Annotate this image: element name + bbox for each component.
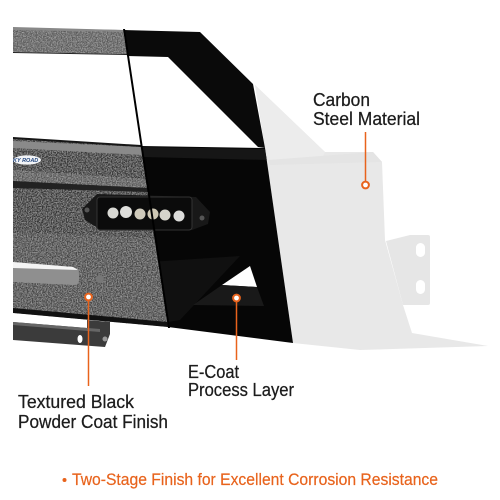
logo badge: KY ROAD (13, 158, 38, 164)
callout: e-coat process layer (188, 295, 294, 400)
icon: mounting bracket (386, 235, 430, 305)
callout: carbon steel material (313, 90, 420, 188)
callout: textured black powder coat: Powder Coat Finish (18, 412, 168, 432)
divider line between finish stages (123, 29, 170, 328)
panel: textured powder coat section (13, 27, 173, 347)
top bar (13, 28, 127, 54)
bolt hole (96, 275, 104, 283)
logo badge (13, 155, 41, 165)
callout: e-coat process layer: Process Layer (188, 380, 294, 400)
callout: e-coat process layer: E-Coat (188, 362, 239, 382)
icon: triangular cut-out (222, 266, 257, 287)
callout: carbon steel material: Steel Material (313, 109, 420, 129)
icon: LED light bar (82, 194, 210, 230)
callout: textured black powder coat (18, 294, 168, 432)
mounting slot (13, 262, 79, 285)
lower body (13, 138, 173, 333)
lower body (141, 146, 293, 343)
panel: carbon steel section (255, 85, 488, 350)
callout: textured black powder coat: Textured Black (18, 392, 135, 412)
callout: carbon steel material: Carbon (313, 90, 370, 110)
upper frame (124, 30, 265, 148)
panel: e-coat black section (124, 30, 293, 343)
caption: two-stage finish: Two-Stage Finish for Excellent Corrosion Resistance (72, 471, 438, 489)
lower tab bracket (13, 320, 110, 347)
